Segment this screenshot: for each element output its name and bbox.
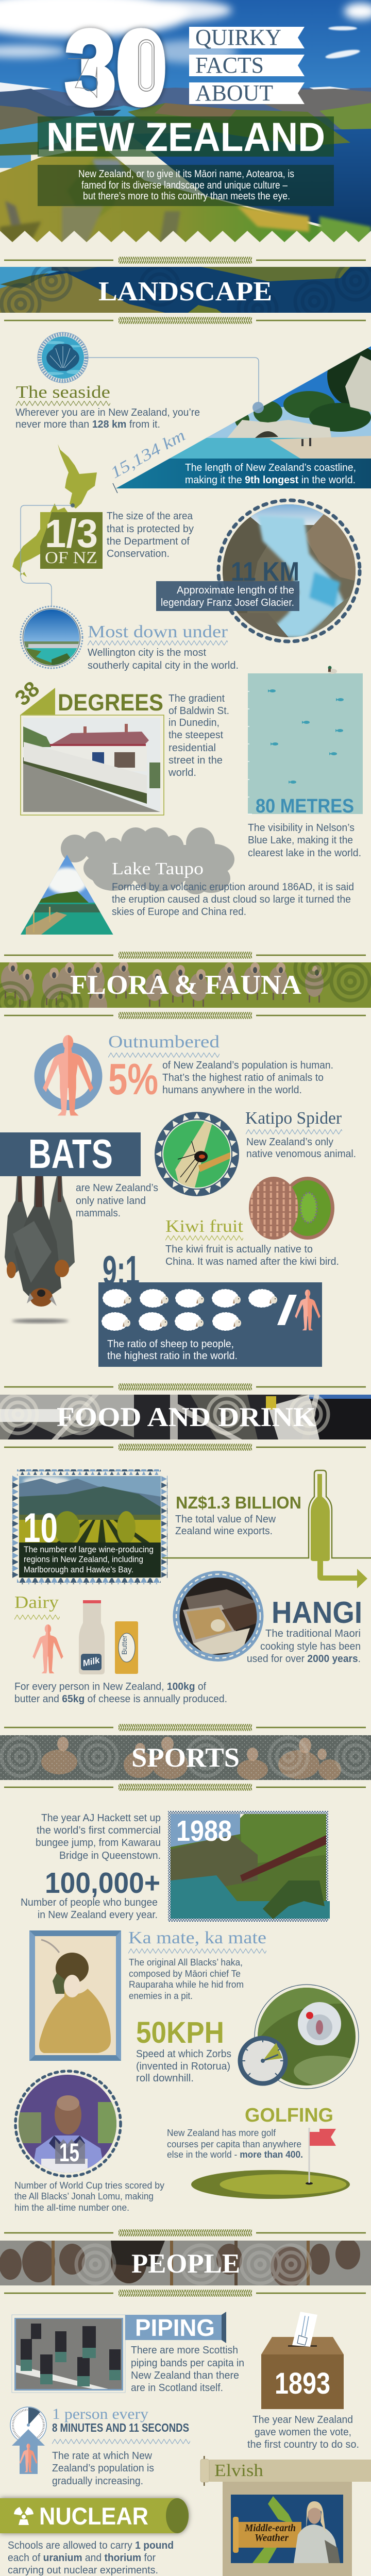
icon: person — [32, 1624, 63, 1673]
stat: golfing: else in the world - more than 400. — [167, 2149, 303, 2160]
text: spider fact: native venomous animal. — [246, 1148, 356, 1160]
stat: 50 KPH: 50KPH — [136, 2016, 224, 2049]
stat box: one third of NZ: OF NZ — [45, 549, 97, 567]
icon: seaside shell medallion — [38, 332, 88, 383]
label: coastline length: 15,134 km — [107, 426, 188, 482]
panel: sheep to people ratio — [98, 1247, 322, 1367]
text: conservation: Conservation. — [107, 548, 170, 560]
text: nuclear fact — [8, 2540, 174, 2576]
text: haka fact: Rauparaha while he hid from — [129, 1979, 244, 1990]
stat: wine exports: The total value of New — [175, 1514, 276, 1525]
text: conservation: the Department of — [107, 536, 190, 547]
icon: wine bottle with arrow — [162, 1470, 371, 1588]
text: Baldwin Street fact: street in the — [168, 755, 223, 766]
photo: vineyard stamp: The number of large wine-producing — [24, 1545, 154, 1554]
text: Baldwin Street fact: in Dunedin, — [168, 717, 220, 728]
section banner: people: PEOPLE — [131, 2249, 240, 2279]
photo: vineyard stamp: 10 — [23, 1505, 58, 1551]
text: haka fact: The original All Blacks’ haka, — [129, 1957, 243, 1968]
ribbon: about — [189, 80, 305, 106]
heading: population rate — [52, 2405, 190, 2444]
intro text: New Zealand, or to give it its Māori name, Aotearoa, is — [78, 168, 294, 180]
panel: Elvish weather report — [200, 2456, 371, 2576]
text: population fact: That’s the highest ratio of animals to — [162, 1072, 324, 1083]
text: Lomu fact — [14, 2180, 164, 2213]
text: Wellington fact: southerly capital city in the world. — [88, 660, 239, 671]
icon: golf green and flag — [191, 2128, 350, 2199]
heading: population rate: 1 person every — [52, 2405, 148, 2422]
text: Wellington fact: Wellington city is the most — [88, 647, 206, 658]
stat: 100,000+ — [21, 1867, 160, 1921]
text: bats fact: are New Zealand’s — [76, 1182, 158, 1194]
heading: ka mate — [128, 1928, 266, 1954]
intro text — [38, 165, 334, 206]
stat: hangi: The traditional Maori — [265, 1628, 361, 1639]
text: Lomu fact: him the all-time number one. — [14, 2202, 129, 2213]
text: vote fact: the first country to do so. — [247, 2439, 359, 2450]
nuclear tube heading — [0, 2498, 189, 2533]
text: population fact — [162, 1060, 333, 1096]
text: haka fact: enemies in a pit. — [129, 1991, 193, 2001]
text: piping fact: piping bands per capita in — [131, 2358, 244, 2369]
text: population fact — [52, 2450, 154, 2487]
stat: hangi: used for over 2000 years. — [247, 1653, 361, 1665]
stat: wine exports — [175, 1493, 301, 1537]
photo: glacier circle — [217, 500, 362, 641]
text: seaside fact: Wherever you are in New Zealand, you’re — [15, 407, 200, 418]
section banner: flora and fauna: FLORA & FAUNA — [70, 970, 301, 1000]
text: bungee fact: bungee jump, from Kawarau — [36, 1837, 161, 1849]
text: haka fact: composed by Māori chief Te — [129, 1969, 241, 1979]
stat: 50 KPH: Speed at which Zorbs — [136, 2048, 231, 2060]
text: population fact: Zealand’s population is — [52, 2463, 154, 2474]
heading: kiwi fruit: Kiwi fruit — [165, 1217, 244, 1236]
text: population fact: humans anywhere in the world. — [162, 1084, 302, 1096]
connector dot — [252, 402, 264, 413]
stat: wine exports: Zealand wine exports. — [175, 1526, 273, 1537]
stat: 50 KPH: roll downhill. — [136, 2073, 194, 2084]
heading: outnumbered — [108, 1032, 220, 1058]
intro text: but there’s more to this country than meets the eye. — [83, 191, 290, 202]
text: bungee fact: the world’s first commercial — [37, 1825, 161, 1836]
stat: 50 KPH — [136, 2016, 231, 2084]
title: New Zealand: NEW ZEALAND — [46, 114, 325, 160]
photo: hangi circle — [173, 1571, 264, 1662]
picture: Te Rauparaha portrait — [29, 1930, 121, 2061]
stat: 11 KM — [156, 557, 299, 611]
icon: butter: Butter — [120, 1635, 128, 1655]
text: Blue Lake fact: clearest lake in the world. — [248, 848, 361, 859]
hero photo: mountains and lake — [0, 0, 371, 242]
stat: hangi — [247, 1596, 362, 1665]
stat: golfing — [167, 2105, 333, 2160]
stat: golfing: courses per capita than anywhere — [167, 2139, 301, 2149]
stat: 5 percent: 5% — [108, 1055, 158, 1104]
heading: ka mate: Ka mate, ka mate — [128, 1928, 266, 1947]
text: piping fact: There are more Scottish — [131, 2345, 238, 2356]
text: Baldwin Street fact: The gradient — [168, 693, 225, 704]
hero panel — [0, 0, 371, 242]
stat: bats: BATS — [28, 1131, 113, 1177]
text: Baldwin Street fact: of Baldwin St. — [168, 705, 229, 717]
stat: 100,000+: Number of people who bungee — [21, 1897, 158, 1908]
section banner: food and drink: FOOD AND DRINK — [57, 1402, 316, 1432]
section banner: sports — [0, 1735, 371, 1780]
text: conservation: that is protected by — [107, 523, 194, 535]
stat: 38 degrees — [10, 676, 163, 716]
text: spider fact — [246, 1137, 356, 1160]
text: conservation — [107, 511, 194, 560]
heading: dairy — [14, 1593, 60, 1620]
stat: hangi: HANGI — [272, 1596, 362, 1630]
stat: golfing: New Zealand has more golf — [167, 2128, 276, 2138]
photo: vineyard stamp: Marlborough and Hawke’s Bay. — [24, 1565, 133, 1574]
text: bungee fact: The year AJ Hackett set up — [41, 1812, 161, 1824]
text: vote fact: gave women the vote, — [255, 2427, 351, 2438]
ribbon: piping — [125, 2312, 226, 2343]
icon: hanging bats — [5, 1176, 75, 1323]
heading: most down under: Most down under — [88, 622, 228, 641]
text: kiwi fact: The kiwi fruit is actually native to — [165, 1244, 313, 1255]
text: Baldwin Street fact: the steepest — [168, 730, 223, 741]
text: piping fact: New Zealand than there — [131, 2370, 239, 2381]
icon: person in ring — [39, 1035, 97, 1115]
panel: sheep to people ratio: The ratio of sheep to people, — [107, 1338, 234, 1350]
sheep icons — [103, 1291, 277, 1329]
text: nuclear fact: each of uranium and thorium for — [8, 2552, 156, 2564]
photo: Kawarau Bridge — [168, 1811, 330, 1922]
photo: middle-earth weather: Weather — [255, 2532, 289, 2544]
text: dairy fact: For every person in New Zealand, 100kg of — [14, 1681, 206, 1692]
text: Lomu fact: Number of World Cup tries scored by — [14, 2180, 164, 2191]
panel: sheep to people ratio: 9:1 — [103, 1247, 140, 1293]
icon: ballot box 1893 — [261, 2312, 344, 2409]
text: Baldwin Street fact — [168, 693, 229, 778]
text: Wellington fact — [88, 647, 239, 671]
photo: coastline triangle — [116, 345, 371, 488]
stat: hangi: cooking style has been — [260, 1641, 361, 1652]
text: bungee fact: Bridge in Queenstown. — [59, 1850, 161, 1861]
photo: middle-earth weather — [231, 2495, 343, 2563]
heading: Lake Taupo: Lake Taupo — [112, 859, 204, 878]
text: piping fact — [131, 2345, 244, 2394]
ribbon: facts: FACTS — [195, 53, 264, 78]
text: Lake Taupo fact: skies of Europe and China red. — [112, 906, 246, 918]
text: spider fact: New Zealand’s only — [246, 1137, 333, 1148]
photo: Scottish pipers — [12, 2315, 125, 2393]
text: seaside fact: never more than 128 km from it. — [15, 419, 160, 430]
map: New Zealand — [12, 444, 97, 577]
text: bats fact — [76, 1182, 158, 1219]
text: vote fact — [247, 2414, 359, 2450]
icon: milk bottle — [79, 1600, 105, 1674]
section banner: sports: SPORTS — [131, 1743, 240, 1773]
photo: middle-earth weather: Middle-earth — [244, 2522, 296, 2534]
icon: clock and population arrow — [10, 2407, 46, 2474]
icon: milk bottle: Milk — [82, 1655, 102, 1668]
text: population fact: of New Zealand’s population is human. — [162, 1060, 333, 1071]
big number 30: 30 — [65, 9, 167, 127]
photo: vineyard stamp: regions in New Zealand, including — [24, 1554, 143, 1564]
photo: Kawarau Bridge: 1988 — [176, 1815, 232, 1848]
text: conservation: The size of the area — [107, 511, 193, 522]
text: dairy fact — [14, 1681, 227, 1705]
text: nuclear fact: carrying out nuclear experiments. — [8, 2565, 158, 2576]
icon: speedometer — [240, 2038, 285, 2083]
text: population fact: gradually increasing. — [52, 2476, 143, 2487]
text: population fact: The rate at which New — [52, 2450, 153, 2462]
photo: vineyard stamp — [12, 1469, 167, 1584]
connector line map to Wellington — [21, 505, 73, 606]
heading: the seaside: The seaside — [16, 383, 110, 402]
icon: duck — [328, 666, 337, 674]
icon: kiwi fruit — [249, 1177, 334, 1240]
ribbon: quirky: QUIRKY — [195, 25, 281, 50]
ribbon: piping: PIPING — [135, 2314, 215, 2341]
text: piping fact: are in Scotland itself. — [131, 2382, 223, 2394]
photo: coastline triangle: making it the 9th longest in the world. — [185, 474, 356, 486]
chart: Blue Lake depth: 80 METRES — [256, 795, 354, 817]
heading: katipo spider: Katipo Spider — [245, 1109, 342, 1128]
section banner: people — [0, 2239, 371, 2287]
stat: 38 degrees: DEGREES — [58, 689, 163, 716]
text: Lake Taupo fact: the eruption caused a dust cloud so large it turned the — [112, 894, 351, 905]
stat: wine exports: NZ$1.3 BILLION — [176, 1493, 301, 1512]
photo: coastline triangle: The length of New Zealand’s coastline, — [185, 462, 356, 473]
heading: outnumbered: Outnumbered — [108, 1032, 220, 1052]
stat: 100,000+: in New Zealand every year. — [38, 1909, 158, 1921]
stat: golfing: GOLFING — [245, 2105, 333, 2126]
stat: 38 degrees: 38 — [10, 676, 44, 710]
text: kiwi fact: China. It was named after the kiwi bird. — [165, 1256, 339, 1267]
chart: Blue Lake depth — [248, 666, 363, 817]
photo: zorb ball — [252, 1984, 366, 2092]
text: Lake Taupo fact: Formed by a volcanic eruption around 186AD, it is said — [112, 882, 354, 893]
stat box: one third of NZ — [40, 512, 103, 569]
section banner: landscape — [0, 267, 371, 313]
stat: 100,000+: 100,000+ — [45, 1867, 160, 1900]
badge: 15: 15 — [59, 2138, 79, 2167]
text: Baldwin Street fact: residential — [168, 742, 216, 754]
label: coastline length — [107, 426, 188, 493]
photo: Wellington circle — [21, 606, 82, 668]
ribbon: about: ABOUT — [195, 80, 273, 106]
volcanic cloud — [61, 827, 234, 894]
heading: population rate: 8 MINUTES AND 11 SECONDS — [52, 2421, 189, 2434]
photo: Jonah Lomu — [15, 2071, 124, 2179]
intro text: famed for its diverse landscape and unique culture – — [81, 180, 288, 191]
connector line seaside to coast — [88, 358, 259, 403]
text: Baldwin Street fact: world. — [168, 767, 196, 778]
ribbon: facts — [189, 53, 305, 78]
text: Lake Taupo fact — [112, 882, 354, 918]
panel: sheep to people ratio: the highest ratio in the world. — [107, 1350, 238, 1362]
stat box: one third of NZ: 1/3 — [45, 512, 98, 556]
photo: katipo spider — [155, 1112, 239, 1196]
text: Blue Lake fact: Blue Lake, making it the — [248, 835, 353, 846]
stat: 11 KM: Approximate length of the — [177, 585, 294, 596]
text: bats fact: only native land — [76, 1195, 146, 1207]
section banner: flora and fauna — [0, 950, 371, 1026]
photo: Lake Taupo triangle — [21, 855, 113, 935]
heading: dairy: Dairy — [14, 1593, 59, 1612]
text: haka fact — [129, 1957, 244, 2001]
text: kiwi fact — [165, 1244, 339, 1267]
text: bats fact: mammals. — [76, 1208, 121, 1219]
text: vote fact: The year New Zealand — [252, 2414, 353, 2426]
text: nuclear fact: Schools are allowed to carry 1 pound — [8, 2540, 174, 2551]
photo: Baldwin Street house — [21, 715, 164, 815]
text: dairy fact: butter and 65kg of cheese is annually produced. — [14, 1693, 227, 1705]
stat: 11 KM: 11 KM — [231, 557, 299, 587]
nuclear tube heading: NUCLEAR — [39, 2502, 148, 2530]
text: Lomu fact: the All Blacks’ Jonah Lomu, making — [14, 2191, 154, 2201]
stat: 11 KM: legendary Franz Josef Glacier. — [161, 597, 294, 608]
panel: Elvish weather report: Elvish — [214, 2461, 263, 2480]
stat: 50 KPH: (invented in Rotorua) — [136, 2061, 230, 2072]
text: seaside fact — [15, 407, 200, 430]
section banner: landscape: LANDSCAPE — [98, 277, 272, 307]
section banner: food and drink — [0, 1395, 371, 1439]
text: Blue Lake fact — [248, 822, 361, 859]
text: bungee fact — [36, 1812, 161, 1861]
icon: butter — [115, 1621, 138, 1674]
text: Blue Lake fact: The visibility in Nelson’s — [248, 822, 355, 834]
icon: ballot box 1893: 1893 — [275, 2367, 330, 2400]
icon: radiation — [14, 2507, 33, 2525]
